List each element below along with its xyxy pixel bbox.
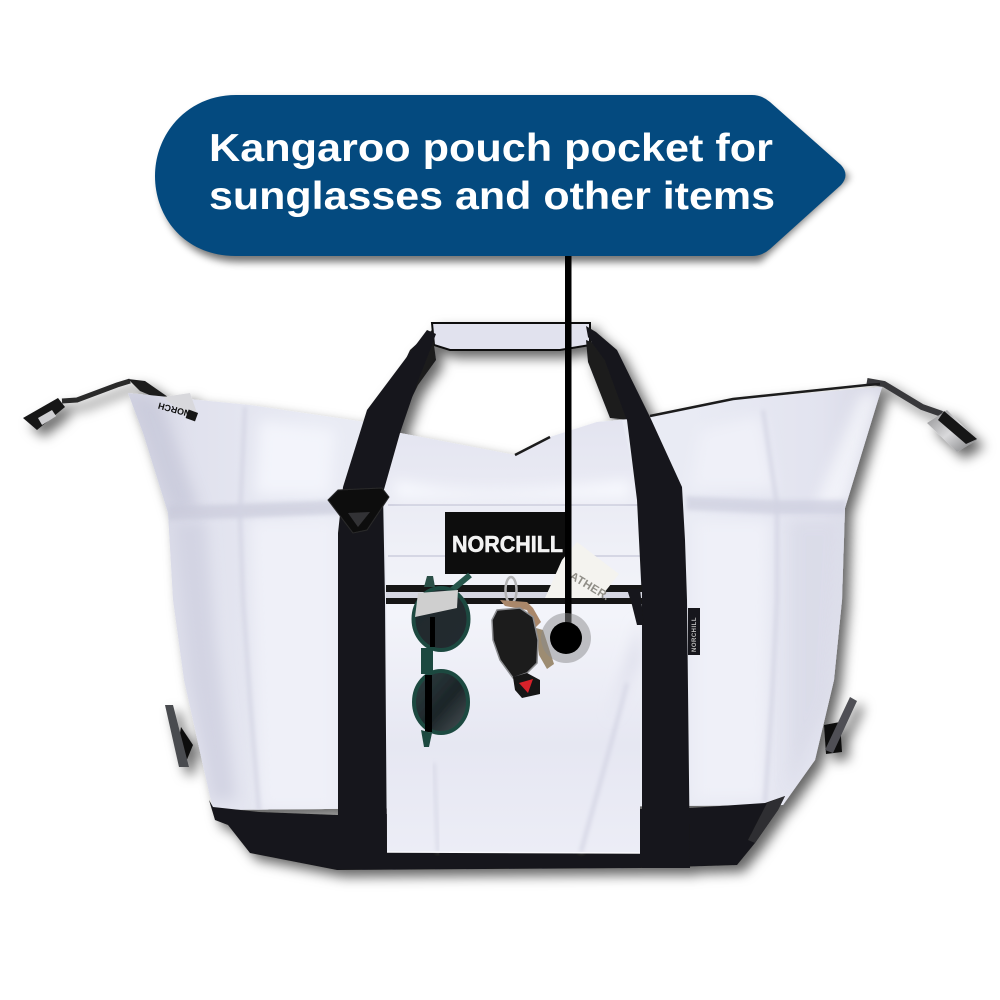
right zipper pull <box>867 381 977 452</box>
brass keys <box>500 600 541 628</box>
bottom hinge <box>421 730 432 747</box>
left zipper tag <box>157 393 198 421</box>
sunglasses <box>414 575 470 747</box>
pocket tag: ATHER. <box>567 570 612 603</box>
temple arm <box>452 575 470 590</box>
key ring <box>506 577 516 603</box>
lens glare <box>415 590 458 617</box>
right strap <box>586 326 690 868</box>
logo patch <box>445 512 570 574</box>
bottom panel edge <box>387 852 640 853</box>
triangle buckle <box>328 488 389 533</box>
left side clip <box>165 705 193 767</box>
lower lens <box>414 671 468 733</box>
product: cooler bag <box>23 323 977 870</box>
base side highlight <box>748 796 785 843</box>
upper temple shadow <box>430 617 435 647</box>
pointer dot <box>541 613 591 663</box>
keys <box>492 577 554 698</box>
bag body <box>128 387 882 810</box>
key fob <box>492 608 538 678</box>
side tab <box>688 608 700 655</box>
fob tail <box>513 673 540 698</box>
pointer line <box>565 255 572 630</box>
right top zipper edge <box>650 384 880 416</box>
back zipper edge <box>515 437 550 455</box>
bridge <box>421 648 433 674</box>
callout banner: sunglasses and other items <box>209 175 775 218</box>
lower temple shadow <box>425 675 432 732</box>
strap loops behind handle <box>372 330 436 432</box>
callout shadow <box>160 100 850 262</box>
callout banner <box>155 95 846 256</box>
left zipper pull <box>23 379 168 430</box>
pocket zipper <box>386 585 644 625</box>
pocket tag <box>545 542 619 603</box>
right side clip <box>824 697 857 754</box>
top hinge <box>424 576 435 587</box>
front panel <box>386 420 640 853</box>
left strap <box>338 330 436 868</box>
quilting shading <box>128 390 880 812</box>
red button <box>519 679 533 693</box>
side tab: NORCHILL <box>692 617 698 652</box>
callout text: Kangaroo pouch pocket for <box>209 127 773 170</box>
logo patch: NORCHILL <box>452 531 563 557</box>
upper lens <box>414 588 468 650</box>
left zipper tag: NORCH <box>157 401 192 419</box>
top handle <box>432 323 590 350</box>
bottom base <box>209 796 785 870</box>
